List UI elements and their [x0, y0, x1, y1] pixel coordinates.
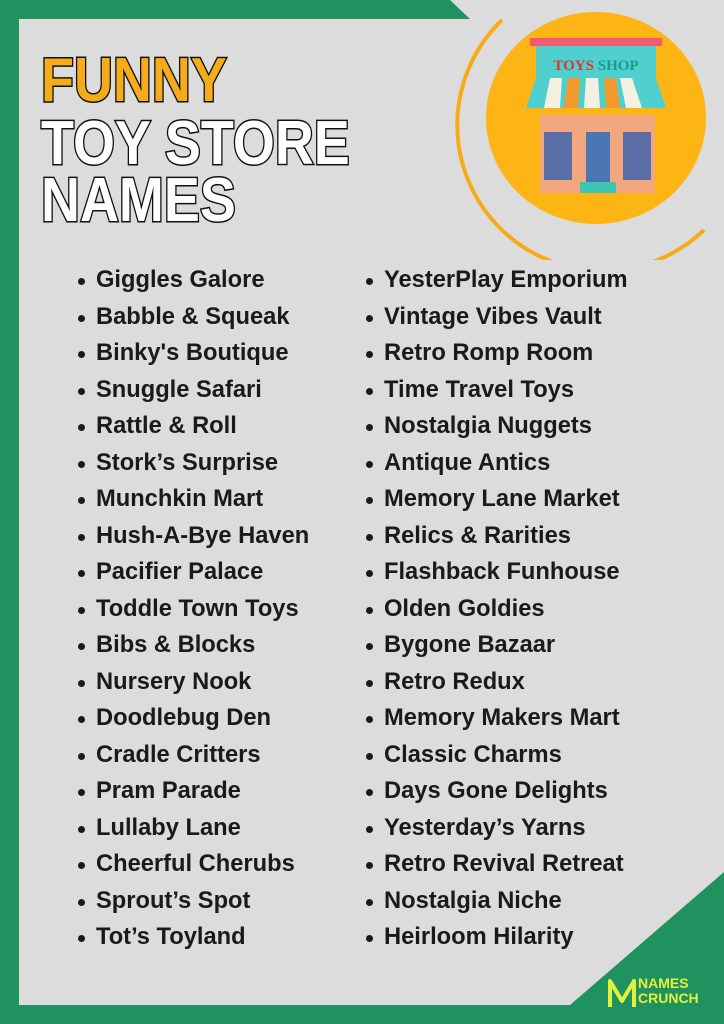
list: column 2: Yesterday’s Yarns — [384, 814, 586, 840]
list: column 2: Classic Charms — [384, 742, 562, 768]
list: column 1: Snuggle Safari — [96, 376, 262, 402]
list: column 1: Hush-A-Bye Haven — [96, 522, 309, 548]
list: column 2: Retro Revival Retreat — [384, 851, 624, 877]
list: column 2: Retro Romp Room — [384, 340, 593, 366]
list: column 2: Vintage Vibes Vault — [384, 304, 602, 330]
list: column 2: Memory Lane Market — [384, 486, 620, 512]
list: column 2: Olden Goldies — [384, 596, 545, 622]
list: column 1: Cheerful Cherubs — [96, 851, 295, 877]
list: column 2 — [366, 267, 628, 950]
logo: NAMES — [638, 975, 689, 991]
list: column 2: Nostalgia Niche — [384, 888, 562, 914]
list: column 2: Bygone Bazaar — [384, 632, 555, 658]
list: column 2: Days Gone Delights — [384, 778, 608, 804]
list: column 1 — [78, 267, 309, 950]
icon: toy shop — [455, 12, 706, 260]
title: FUNNY — [41, 46, 227, 115]
list: column 1: Sprout’s Spot — [96, 888, 250, 914]
list: column 2: Antique Antics — [384, 450, 550, 476]
list: column 1: Tot’s Toyland — [96, 924, 246, 950]
list: column 1: Lullaby Lane — [96, 814, 241, 840]
list: column 1: Nursery Nook — [96, 668, 251, 694]
list: column 2: Flashback Funhouse — [384, 559, 620, 585]
logo: CRUNCH — [638, 990, 699, 1006]
icon: toy shop: TOYS SHOP — [553, 58, 639, 74]
list: column 1: Stork’s Surprise — [96, 450, 278, 476]
list: column 1: Toddle Town Toys — [96, 596, 299, 622]
list: column 2: Retro Redux — [384, 668, 525, 694]
list: column 1: Babble & Squeak — [96, 304, 290, 330]
list: column 1: Cradle Critters — [96, 742, 261, 768]
logo — [608, 975, 699, 1007]
title: NAMES — [41, 166, 236, 235]
list: column 1: Rattle & Roll — [96, 413, 237, 439]
list: column 2: Heirloom Hilarity — [384, 924, 574, 950]
list: column 2: Nostalgia Nuggets — [384, 413, 592, 439]
list: column 2: Relics & Rarities — [384, 522, 571, 548]
list: column 1: Munchkin Mart — [96, 486, 263, 512]
list: column 1: Bibs & Blocks — [96, 632, 255, 658]
list: column 1: Binky's Boutique — [96, 340, 289, 366]
list: column 1: Pram Parade — [96, 778, 241, 804]
list: column 2: Time Travel Toys — [384, 376, 574, 402]
title: TOY STORE — [41, 109, 350, 178]
title — [40, 46, 350, 235]
list: column 1: Pacifier Palace — [96, 559, 263, 585]
list: column 2: Memory Makers Mart — [384, 705, 620, 731]
list: column 1: Doodlebug Den — [96, 705, 271, 731]
list: column 1: Giggles Galore — [96, 267, 264, 293]
list: column 2: YesterPlay Emporium — [384, 267, 628, 293]
